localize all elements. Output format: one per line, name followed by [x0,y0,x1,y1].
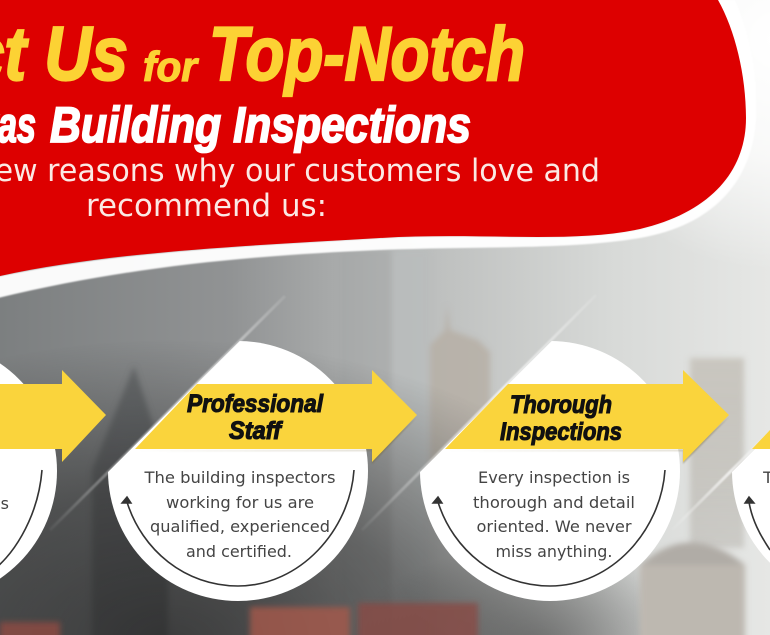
glint [50,296,285,530]
description: oriented. We never [476,517,632,536]
subtitle: few reasons why our customers love and [0,153,600,189]
title line 1 [0,12,525,97]
description [473,468,635,561]
step 2: Professional Staff [50,296,417,601]
description: The building inspectors [143,468,336,487]
heading [500,391,622,446]
title line 2: Building Inspections [50,97,471,153]
circle [108,341,368,601]
description: miss anything. [496,542,612,561]
curved arrow [433,470,665,586]
step 1: partially cropped circle: s [1,494,9,513]
heading: Professional [187,390,324,418]
description: qualified, experienced [150,517,330,536]
heading [187,390,324,445]
red banner [0,0,746,276]
title line 1: for [143,43,200,90]
description: thorough and detail [473,493,635,512]
arrow [135,370,417,464]
circle [420,341,680,601]
step 4: partially cropped circle [688,430,770,562]
subtitle: recommend us: [86,188,327,224]
heading: Inspections [500,418,622,446]
description: working for us are [166,493,314,512]
white wave under the red banner [0,0,756,300]
step 1: partially cropped circle [0,364,106,578]
description: and certified. [186,542,292,561]
heading: Staff [229,417,284,445]
description: Every inspection is [478,468,630,487]
arrow [445,370,729,464]
heading: Thorough [510,391,612,419]
subtitle [0,153,600,224]
description [143,468,336,561]
step 3: Thorough Inspections [362,295,729,601]
curved arrow [122,470,354,586]
title line 1: Top-Notch [209,12,525,97]
glint [362,295,596,530]
